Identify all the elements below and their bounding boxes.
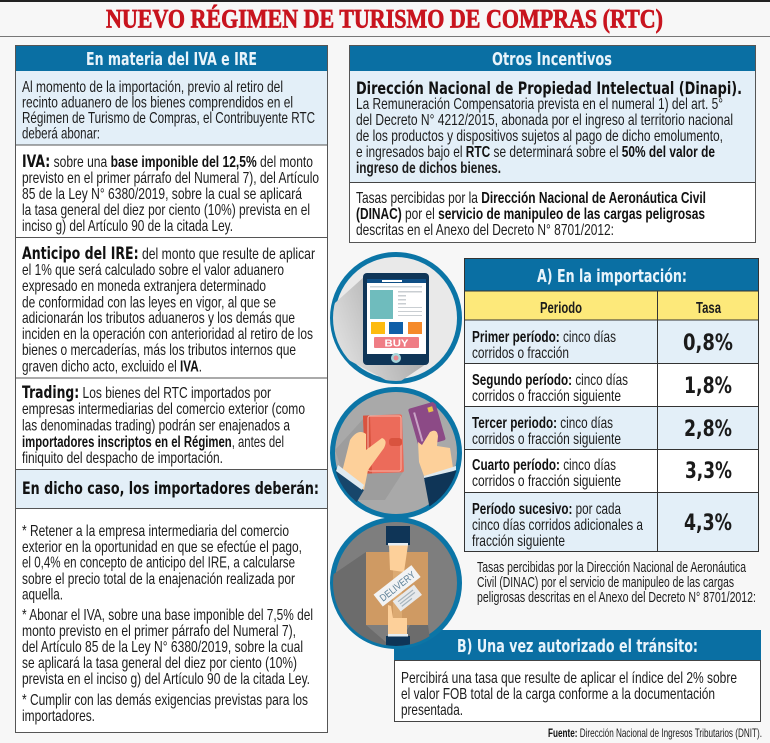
Dinapi block (349, 71, 756, 182)
obligations list: prevista en el inciso g) del Artículo 90 de la citada Ley. (22, 671, 310, 688)
panel: Otros Incentivos (349, 45, 756, 242)
row: primer período: 0,8% (683, 331, 733, 356)
IVA block: IVA: sobre una base imponible del 12,5% del monto (22, 152, 313, 171)
panel header (349, 45, 756, 71)
column headers: Periodo (540, 300, 582, 317)
intro text: Régimen de Turismo de Compras, el Contribuyente RTC (22, 110, 315, 127)
obligations list: importadores. (22, 708, 95, 725)
row: cuarto período: 3,3% (685, 459, 732, 484)
row: tercer período: corridos o fracción siguiente (472, 431, 621, 448)
intro text: Al momento de la importación, previo al retiro del (22, 79, 283, 96)
icon: wallet and card hands (325, 390, 460, 516)
column headers: Tasa (696, 300, 721, 317)
icon: delivery box hands (325, 520, 460, 650)
row: primer período: Primer período: cinco días (472, 329, 616, 346)
table header (464, 258, 759, 291)
Dinapi block: e ingresados bajo el RTC se determinará sobre el 50% del valor de (356, 144, 715, 161)
row: primer período: corridos o fracción (472, 345, 569, 362)
row: segundo período: Segundo período: cinco días (472, 372, 628, 389)
IVA block: inciso g) del Artículo 90 de la citada Ley. (22, 218, 233, 235)
Trading block (22, 383, 305, 467)
IVA block: 85 de la Ley N° 6380/2019, sobre la cual se aplicará (22, 186, 302, 203)
Anticipo del IRE block (15, 244, 328, 378)
DINAC text: descritas en el Anexo del Decreto N° 8701/2012: (356, 222, 614, 239)
Trading block: Trading: Los bienes del RTC importados por (22, 383, 271, 402)
row: segundo período: corridos o fracción siguiente (472, 388, 621, 405)
icon: tablet: BUY (384, 338, 409, 350)
panel: En materia del IVA e IRE (15, 45, 328, 732)
obligations list: * Cumplir con las demás exigencias previstas para los (22, 692, 308, 709)
panel text: presentada. (401, 702, 463, 719)
Anticipo del IRE block: inciden en la operación con anterioridad al retiro de los (22, 326, 313, 343)
row: segundo período: 1,8% (684, 374, 732, 399)
Trading block: las denominadas trading) podrán ser enajenados a (22, 418, 290, 434)
row: período sucesivo (472, 501, 732, 550)
subheading: En dicho caso (15, 470, 328, 508)
panel header (15, 45, 328, 71)
panel: B) Una vez autorizado el tránsito (394, 630, 761, 722)
intro text (15, 71, 328, 145)
row: período sucesivo: fracción siguiente (472, 533, 565, 550)
intro text: deberá abonar: (22, 126, 100, 142)
obligations list: sobre el precio total de la enajenación realizada por (22, 571, 295, 588)
IVA block (15, 152, 328, 238)
title: NUEVO RÉGIMEN DE TURISMO DE COMPRAS (RTC) (106, 4, 663, 34)
obligations list: monto previsto en el primer párrafo del Numeral 7), (22, 623, 296, 640)
row: tercer período (472, 415, 732, 448)
table: A) En la importación (464, 258, 759, 552)
obligations list: del Artículo 85 de la Ley N° 6380/2019, sobre la cual (22, 639, 303, 656)
Anticipo del IRE block: Anticipo del IRE: del monto que resulte de aplicar (22, 244, 316, 263)
Anticipo del IRE block: graven dicho acto, excluido el IVA. (22, 358, 202, 376)
DINAC text (356, 190, 706, 239)
Trading block: finiquito del despacho de importación. (22, 450, 223, 467)
row: segundo período (472, 372, 732, 405)
obligations list (22, 523, 313, 725)
IVA block: la tasa general del diez por ciento (10%) prevista en el (22, 202, 310, 219)
column headers (465, 291, 758, 320)
icon: tablet (325, 254, 460, 385)
obligations list: exterior en la oportunidad en que se efectúe el pago, (22, 539, 302, 556)
panel text (401, 670, 737, 719)
Dinapi block: ingreso de dichos bienes. (356, 160, 501, 177)
Trading block: empresas intermediarias del comercio exterior (como (22, 401, 305, 418)
table header: A) En la importación: (537, 266, 687, 287)
obligations list: se aplicará la tasa general del diez por ciento (10%) (22, 655, 297, 672)
panel header (394, 630, 761, 660)
obligations list: aquella. (22, 586, 63, 604)
Anticipo del IRE block: el 1% que será calculado sobre el valor aduanero (22, 262, 284, 279)
row: cuarto período: corridos o fracción siguiente (472, 473, 621, 490)
obligations list: * Retener a la empresa intermediaria del comercio (22, 523, 289, 540)
row: período sucesivo: 4,3% (684, 511, 732, 536)
row: tercer período: Tercer periodo: cinco días (472, 415, 613, 432)
IVA block: previsto en el primer párrafo del Numeral 7), del Artículo (22, 170, 319, 187)
panel header: En materia del IVA e IRE (86, 49, 257, 70)
row: cuarto período (472, 457, 732, 490)
icon: delivery box hands: DELIVERY (378, 570, 418, 604)
obligations list: el 0,4% en concepto de anticipo del IRE, a calcularse (22, 554, 295, 572)
Anticipo del IRE block: bienes o mercaderías, más los tributos internos que (22, 342, 296, 359)
obligations list: * Abonar el IVA, sobre una base imponible del 7,5% del (22, 607, 313, 624)
Trading block: importadores inscriptos en el Régimen, antes del (22, 434, 284, 451)
intro text: recinto aduanero de los bienes comprendidos en el (22, 94, 293, 112)
row: período sucesivo: Período sucesivo: por cada (472, 501, 621, 518)
Anticipo del IRE block: de conformidad con las leyes en vigor, al que se (22, 294, 276, 312)
table note (477, 559, 756, 606)
row: primer período (472, 329, 733, 362)
row: cuarto período: Cuarto período: cinco días (472, 457, 616, 474)
subheading: En dicho caso: En dicho caso, los importadores deberán: (22, 479, 319, 498)
row: período sucesivo: cinco días corridos adicionales a (472, 517, 643, 534)
row: tercer período: 2,8% (684, 417, 732, 442)
Anticipo del IRE block: expresado en moneda extranjera determinado (22, 278, 266, 295)
Anticipo del IRE block: adicionarán los tributos aduaneros y los demás que (22, 310, 295, 327)
panel header: Otros Incentivos (492, 49, 612, 70)
